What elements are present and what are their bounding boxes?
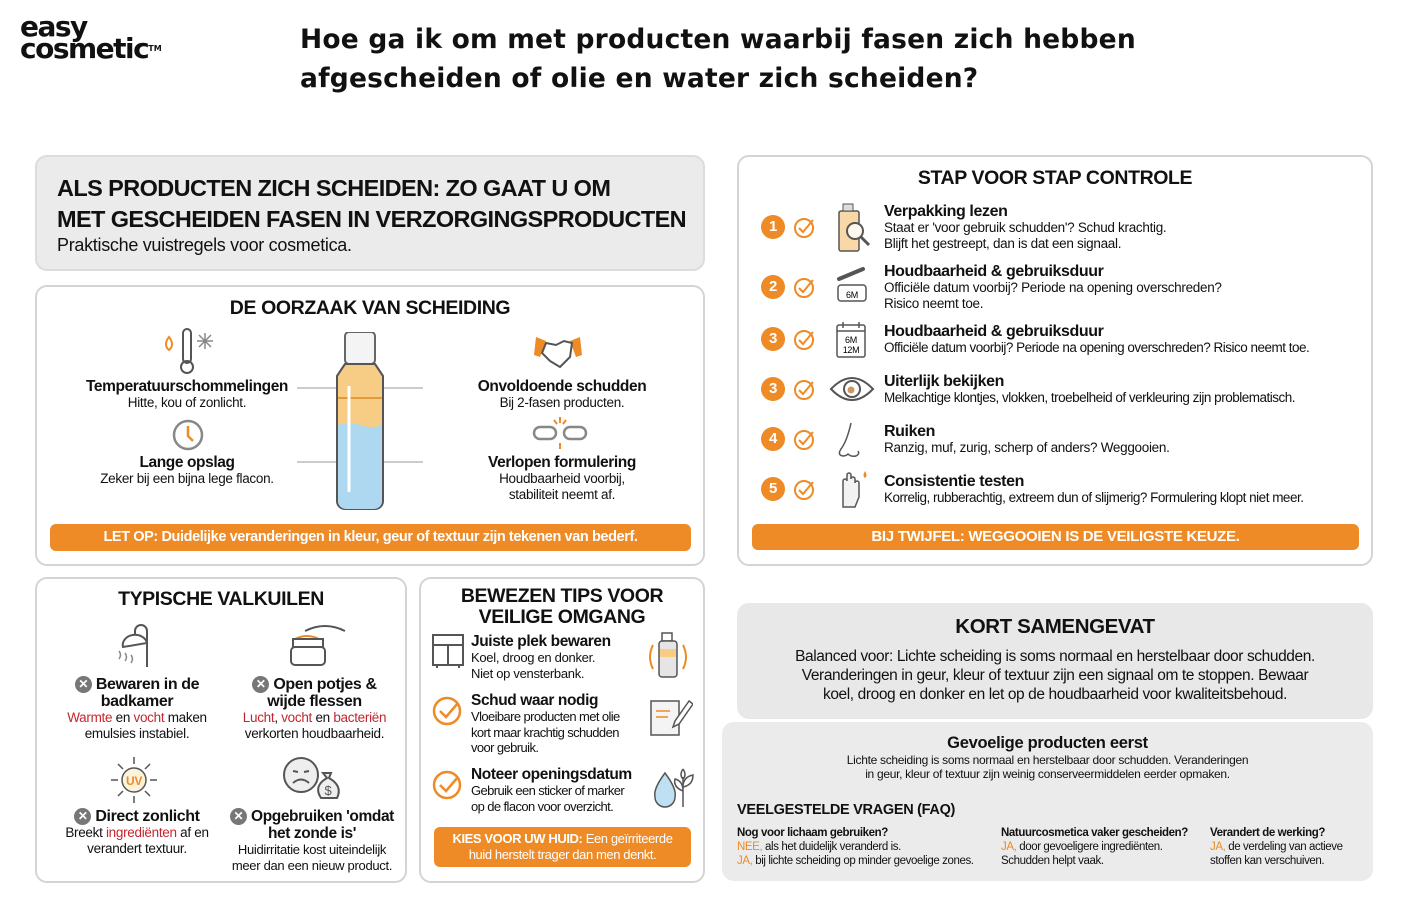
panel: kort samengevat bbox=[737, 603, 1373, 719]
icon: shower bbox=[118, 624, 148, 667]
pitfall: open potjes: Lucht, vocht en bacteriën bbox=[243, 710, 386, 725]
step 2 bbox=[761, 263, 1222, 311]
icon: clock bbox=[172, 420, 204, 450]
tip: plek: Juiste plek bewaren bbox=[471, 633, 611, 650]
step 5: 4 bbox=[769, 430, 777, 447]
pitfall: zonlicht: verandert textuur. bbox=[87, 840, 187, 856]
tip: schud: Vloeibare producten met olie bbox=[471, 709, 620, 724]
gevoelige text bbox=[847, 753, 1248, 781]
callout: bij twijfel: BIJ TWIJFEL: WEGGOOIEN IS DE VEILIGSTE KEUZE. bbox=[871, 528, 1240, 545]
callout: let op: LET OP: Duidelijke veranderingen in kleur, geur of textuur zijn tekenen van bederf. bbox=[103, 529, 638, 545]
faq 1: Nog voor lichaam gebruiken? bbox=[737, 827, 888, 839]
samengevat text bbox=[795, 648, 1315, 703]
callout: let op bbox=[50, 524, 691, 551]
step 1: Staat er 'voor gebruik schudden'? Schud krachtig. bbox=[884, 220, 1166, 235]
icon: shaking bottle bbox=[649, 632, 687, 678]
faq 3: JA, de verdeling van actieve bbox=[1210, 841, 1343, 853]
tips heading: VEILIGE OMGANG bbox=[479, 606, 645, 628]
callout: kies voor uw huid bbox=[434, 827, 691, 867]
faq 3: Verandert de werking? bbox=[1210, 827, 1325, 839]
faq 2: Natuurcosmetica vaker gescheiden? bbox=[1001, 827, 1188, 839]
pitfall: open potjes bbox=[243, 676, 386, 740]
samengevat heading: KORT SAMENGEVAT bbox=[955, 615, 1155, 638]
icon: broken chain bbox=[532, 417, 588, 449]
step 3: 6M bbox=[845, 335, 857, 345]
pitfall: zonlicht: Breekt ingrediënten af en bbox=[65, 825, 209, 840]
faq 1 bbox=[737, 827, 974, 867]
header heading bbox=[57, 175, 686, 232]
faq 3 bbox=[1210, 826, 1343, 868]
pitfall: open potjes: ✕ bbox=[256, 677, 266, 691]
samengevat text: Veranderingen in geur, kleur of textuur zijn een signaal om te stoppen. Bewaar bbox=[802, 667, 1308, 684]
pitfall: opgebruiken: Huidirritatie kost uiteindelijk bbox=[238, 842, 386, 857]
icon: drop leaf bbox=[654, 768, 694, 808]
cause: verlopen bbox=[488, 454, 636, 502]
pitfall: zonlicht: ✕ bbox=[78, 809, 88, 823]
faq 2 bbox=[1001, 827, 1188, 867]
tips heading bbox=[461, 585, 664, 628]
logo: cosmeticTM bbox=[20, 32, 162, 65]
gevoelige text: in geur, kleur of textuur zijn weinig conserveermiddelen eerder opmaken. bbox=[865, 767, 1230, 781]
pitfall: open potjes: verkorten houdbaarheid. bbox=[245, 726, 384, 740]
tip: schud: kort maar krachtig schudden bbox=[471, 724, 619, 740]
step 2: 2 bbox=[769, 278, 777, 295]
gevoelige text: Lichte scheiding is soms normaal en herstelbaar door schudden. Veranderingen bbox=[847, 753, 1248, 767]
logo bbox=[20, 10, 162, 65]
pitfall: opgebruiken: ✕ bbox=[234, 809, 244, 823]
step 5 bbox=[761, 422, 1170, 457]
icon: sad face money: $ bbox=[325, 783, 333, 798]
tip: openingsdatum: op de flacon voor overzicht. bbox=[471, 798, 613, 814]
pitfall: badkamer: Bewaren in de bbox=[96, 676, 199, 693]
step 1: Blijft het gestreept, dan is dat een signaal. bbox=[884, 236, 1121, 251]
title bbox=[300, 24, 1136, 94]
step 4: Uiterlijk bekijken bbox=[884, 373, 1004, 390]
icon: UV sun: UV bbox=[126, 774, 142, 788]
step 1: Verpakking lezen bbox=[884, 203, 1007, 220]
step 1 bbox=[761, 203, 1166, 252]
oorzaak heading: DE OORZAAK VAN SCHEIDING bbox=[230, 297, 510, 319]
pitfall: opgebruiken: het zonde is' bbox=[268, 825, 356, 842]
icon: sad face money bbox=[283, 757, 340, 799]
title: afgescheiden of olie en water zich scheiden? bbox=[300, 63, 978, 94]
icon: check 2 bbox=[432, 770, 462, 800]
tip: schud bbox=[471, 692, 620, 755]
panel: tips bbox=[419, 577, 705, 883]
icon: jar bbox=[290, 625, 346, 666]
pitfall: zonlicht: Direct zonlicht bbox=[95, 808, 200, 825]
cause: temperatuur: Temperatuurschommelingen bbox=[86, 378, 288, 395]
faq 3: stoffen kan verschuiven. bbox=[1210, 855, 1324, 867]
step 4 bbox=[761, 373, 1295, 405]
step 6: Consistentie testen bbox=[884, 473, 1024, 490]
pitfall: badkamer bbox=[67, 676, 207, 740]
tip: openingsdatum bbox=[471, 766, 632, 814]
pitfall: opgebruiken: Opgebruiken 'omdat bbox=[251, 808, 394, 825]
cause: lange opslag: Zeker bij een bijna lege flacon. bbox=[100, 471, 274, 486]
cause: lange opslag bbox=[100, 454, 274, 486]
step 6: Korrelig, rubberachtig, extreem dun of slijmerig? Formulering klopt niet meer. bbox=[884, 490, 1303, 505]
faq 2: Schudden helpt vaak. bbox=[1001, 855, 1104, 867]
step 3: 3 bbox=[769, 330, 777, 347]
samengevat text: Balanced voor: Lichte scheiding is soms normaal en herstelbaar door schudden. bbox=[795, 648, 1315, 665]
icon: thermometer bbox=[165, 328, 213, 374]
cause: schudden: Bij 2-fasen producten. bbox=[500, 395, 624, 410]
pitfall: badkamer: badkamer bbox=[101, 693, 173, 710]
panel: valkuilen bbox=[35, 577, 407, 883]
step 2: Officiële datum voorbij? Periode na opening overschreden? bbox=[884, 280, 1222, 295]
tip: plek bbox=[471, 633, 611, 680]
step 3 bbox=[761, 322, 1309, 358]
logo: easy bbox=[20, 10, 87, 43]
callout: kies voor uw huid: huid herstelt trager dan men denkt. bbox=[469, 847, 656, 862]
samengevat text: koel, droog en donker en let op de houdbaarheid voor kwaliteitsbehoud. bbox=[823, 686, 1287, 703]
step 5: Ruiken bbox=[884, 423, 935, 440]
cause: verlopen: Houdbaarheid voorbij, bbox=[499, 471, 625, 486]
pitfall: badkamer: emulsies instabiel. bbox=[85, 726, 189, 740]
header panel bbox=[35, 155, 705, 271]
faq 1: NEE, als het duidelijk veranderd is. bbox=[737, 841, 901, 853]
step 1: 1 bbox=[769, 218, 777, 235]
step 3: Officiële datum voorbij? Periode na opening overschreden? Risico neemt toe. bbox=[884, 340, 1309, 355]
step 2: Risico neemt toe. bbox=[884, 296, 983, 311]
pitfall: badkamer: Warmte en vocht maken bbox=[67, 710, 207, 725]
pitfall: zonlicht bbox=[65, 808, 209, 856]
header subtitle: Praktische vuistregels voor cosmetica. bbox=[57, 235, 352, 255]
step 6 bbox=[761, 471, 1303, 508]
pitfall: badkamer: ✕ bbox=[78, 677, 88, 691]
tips heading: BEWEZEN TIPS VOOR bbox=[461, 585, 663, 607]
step 3: 12M bbox=[843, 345, 859, 355]
cause: verlopen: stabiliteit neemt af. bbox=[509, 486, 615, 502]
icon: UV sun bbox=[111, 757, 157, 803]
title: Hoe ga ik om met producten waarbij fasen zich hebben bbox=[300, 24, 1136, 55]
faq heading: VEELGESTELDE VRAGEN (FAQ) bbox=[737, 802, 955, 818]
step 4: Melkachtige klontjes, vlokken, troebelheid of verkleuring zijn problematisch. bbox=[884, 390, 1295, 405]
step 3: Houdbaarheid & gebruiksduur bbox=[884, 323, 1103, 340]
callout: bij twijfel bbox=[752, 524, 1359, 550]
tip: plek: Koel, droog en donker. bbox=[471, 650, 595, 665]
step 6: 5 bbox=[769, 480, 777, 497]
header heading: ALS PRODUCTEN ZICH SCHEIDEN: ZO GAAT U OM bbox=[57, 175, 610, 201]
cause: verlopen: Verlopen formulering bbox=[488, 454, 636, 471]
cause: lange opslag: Lange opslag bbox=[139, 454, 235, 471]
tip: schud: Schud waar nodig bbox=[471, 692, 598, 709]
cause: schudden bbox=[478, 378, 646, 410]
valkuilen heading: TYPISCHE VALKUILEN bbox=[118, 588, 324, 610]
step 5: Ranzig, muf, zurig, scherp of anders? Weggooien. bbox=[884, 440, 1170, 455]
step 4: 3 bbox=[769, 380, 777, 397]
pitfall: open potjes: Open potjes & bbox=[273, 676, 377, 693]
panel: stap voor stap bbox=[737, 155, 1373, 566]
gevoelige heading: Gevoelige producten eerst bbox=[947, 734, 1148, 752]
pitfall: open potjes: wijde flessen bbox=[267, 693, 362, 710]
panel: oorzaak bbox=[35, 285, 705, 566]
tip: openingsdatum: Noteer openingsdatum bbox=[471, 766, 632, 783]
pitfall: opgebruiken: meer dan een nieuw product. bbox=[232, 858, 392, 872]
panel: gevoelige producten & faq bbox=[722, 722, 1373, 881]
faq 1: JA, bij lichte scheiding op minder gevoelige zones. bbox=[737, 855, 974, 867]
icon: note pencil bbox=[650, 700, 693, 736]
cause: temperatuur: Hitte, kou of zonlicht. bbox=[128, 395, 246, 410]
step 2: 6M bbox=[846, 290, 858, 300]
faq 2: JA, door gevoeligere ingrediënten. bbox=[1001, 841, 1163, 853]
icon: handshake bbox=[534, 337, 582, 368]
tip: openingsdatum: Gebruik een sticker of marker bbox=[471, 783, 624, 798]
cause: temperatuur bbox=[86, 378, 288, 410]
header heading: MET GESCHEIDEN FASEN IN VERZORGINGSPRODUCTEN bbox=[57, 206, 686, 232]
icon: cabinet bbox=[432, 634, 464, 668]
pitfall: opgebruiken bbox=[230, 808, 394, 872]
stap heading: STAP VOOR STAP CONTROLE bbox=[918, 167, 1192, 189]
step 2: Houdbaarheid & gebruiksduur bbox=[884, 263, 1103, 280]
callout: kies voor uw huid: KIES VOOR UW HUID: Een geïrriteerde bbox=[452, 831, 673, 846]
icon: check 1 bbox=[432, 696, 462, 726]
tip: plek: Niet op vensterbank. bbox=[471, 666, 584, 680]
tip: schud: voor gebruik. bbox=[471, 740, 538, 755]
icon: bottle bbox=[297, 332, 423, 510]
cause: schudden: Onvoldoende schudden bbox=[478, 378, 646, 395]
